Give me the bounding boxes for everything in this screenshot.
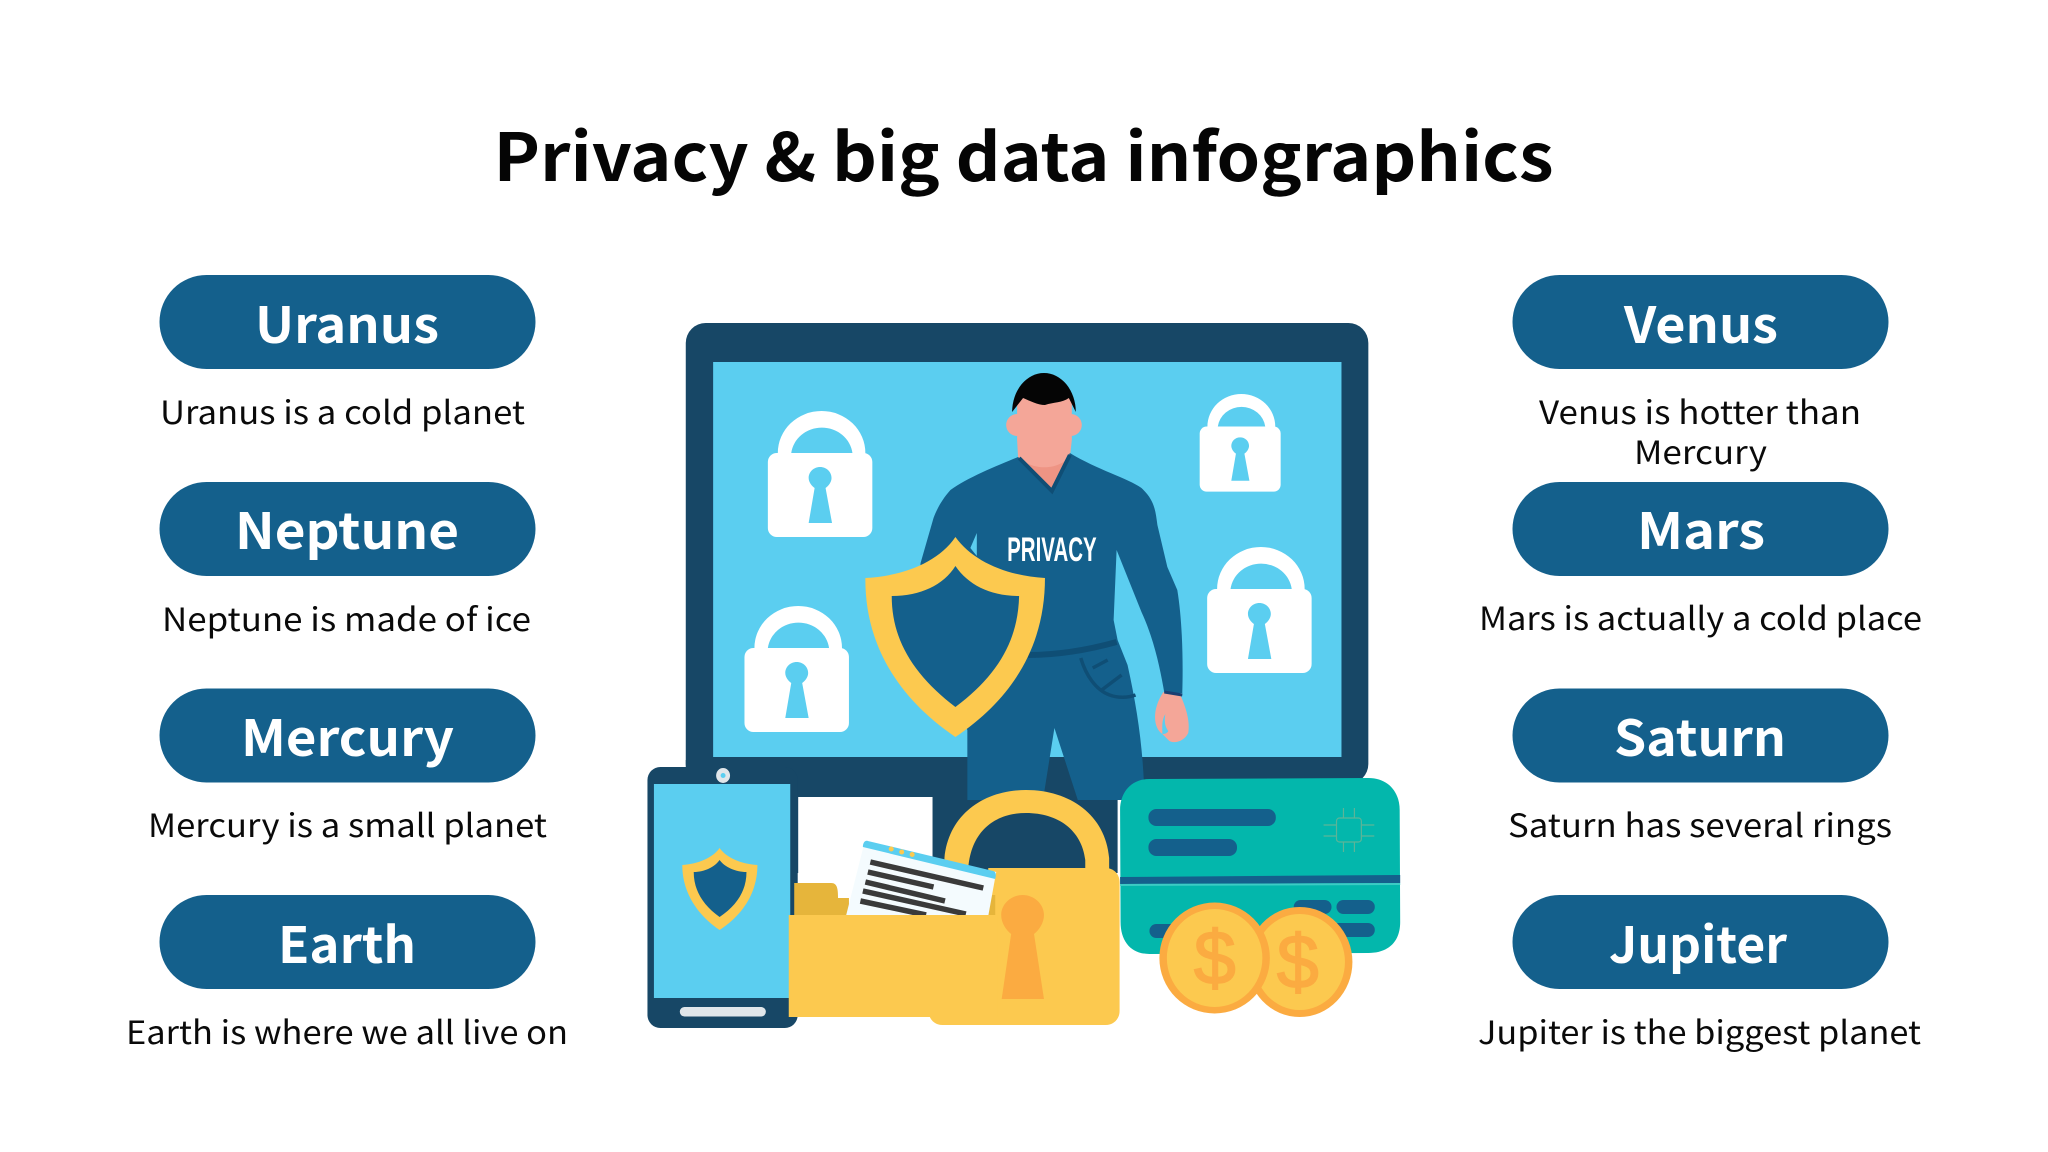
coin left: $	[1194, 916, 1236, 1001]
icon: large shield	[865, 537, 1045, 737]
pill: Earth	[160, 895, 536, 989]
description: Neptune: Neptune is made of ice	[162, 595, 531, 641]
folder back sliver	[983, 895, 995, 917]
credit card	[1120, 778, 1400, 954]
folder front	[789, 915, 998, 1017]
coin right	[1247, 907, 1352, 1017]
pill: Saturn	[1512, 688, 1888, 782]
panel: Venus	[1512, 275, 1888, 474]
icon: padlock lower left	[744, 606, 849, 732]
panel: Neptune	[160, 482, 536, 641]
panel: Saturn	[1508, 688, 1892, 847]
pill: Jupiter	[1512, 895, 1888, 989]
monitor	[686, 323, 1368, 873]
description: Mars: Mars is actually a cold place	[1479, 594, 1922, 640]
document	[846, 841, 996, 916]
panel: Uranus	[160, 275, 536, 434]
pill: Mercury	[160, 688, 536, 782]
pill: Earth: Earth	[278, 906, 416, 978]
panel: Jupiter	[1478, 895, 1921, 1054]
title: Privacy & big data infographics	[494, 105, 1554, 201]
description: Venus: Mercury	[1634, 428, 1767, 474]
panel: Mars	[1479, 482, 1922, 640]
figure: man wearing privacy shirt	[917, 373, 1189, 800]
description: Earth: Earth is where we all live on	[126, 1008, 568, 1054]
description: Mercury: Mercury is a small planet	[148, 801, 547, 847]
icon: phone shield	[682, 848, 757, 930]
icon: padlock top left	[768, 411, 872, 537]
description: Jupiter: Jupiter is the biggest planet	[1478, 1008, 1921, 1054]
shirt and trousers	[917, 453, 1183, 800]
coin left	[1159, 902, 1270, 1014]
pill: Mercury: Mercury	[241, 699, 454, 771]
pill: Venus	[1512, 275, 1888, 369]
hair	[1012, 373, 1076, 412]
pill: Neptune	[160, 482, 536, 576]
pill: Saturn: Saturn	[1614, 699, 1786, 771]
coin right: $	[1277, 920, 1319, 1005]
icon: padlock lower right	[1207, 547, 1312, 673]
phone	[647, 767, 798, 1028]
pill: Uranus: Uranus	[255, 286, 439, 358]
description: Venus	[1539, 388, 1861, 474]
pill: Mars	[1512, 482, 1888, 576]
cuff	[1164, 692, 1182, 695]
central illustration	[647, 323, 1400, 1028]
paper sheet	[798, 797, 933, 915]
large padlock	[929, 790, 1120, 1025]
belt	[1028, 642, 1117, 655]
pill: Uranus	[160, 275, 536, 369]
pocket	[1081, 658, 1136, 697]
pill: Venus: Venus	[1623, 286, 1778, 358]
collar	[1019, 455, 1070, 491]
description: Venus: Venus is hotter than	[1539, 388, 1861, 434]
panel: Earth	[126, 895, 568, 1054]
pill: Mars: Mars	[1637, 492, 1765, 564]
card chip	[1324, 808, 1374, 852]
neck and face	[1006, 395, 1082, 492]
panel: Mercury	[148, 688, 547, 847]
shirt label: PRIVACY	[1007, 531, 1097, 569]
hand	[1155, 692, 1189, 742]
pill: Jupiter: Jupiter	[1609, 906, 1787, 978]
description: Saturn: Saturn has several rings	[1508, 801, 1892, 847]
icon: padlock top right	[1200, 394, 1281, 492]
pill: Neptune: Neptune	[235, 492, 459, 564]
folder tab	[794, 883, 849, 915]
description: Uranus: Uranus is a cold planet	[160, 388, 525, 434]
sleeve gap	[970, 533, 977, 556]
